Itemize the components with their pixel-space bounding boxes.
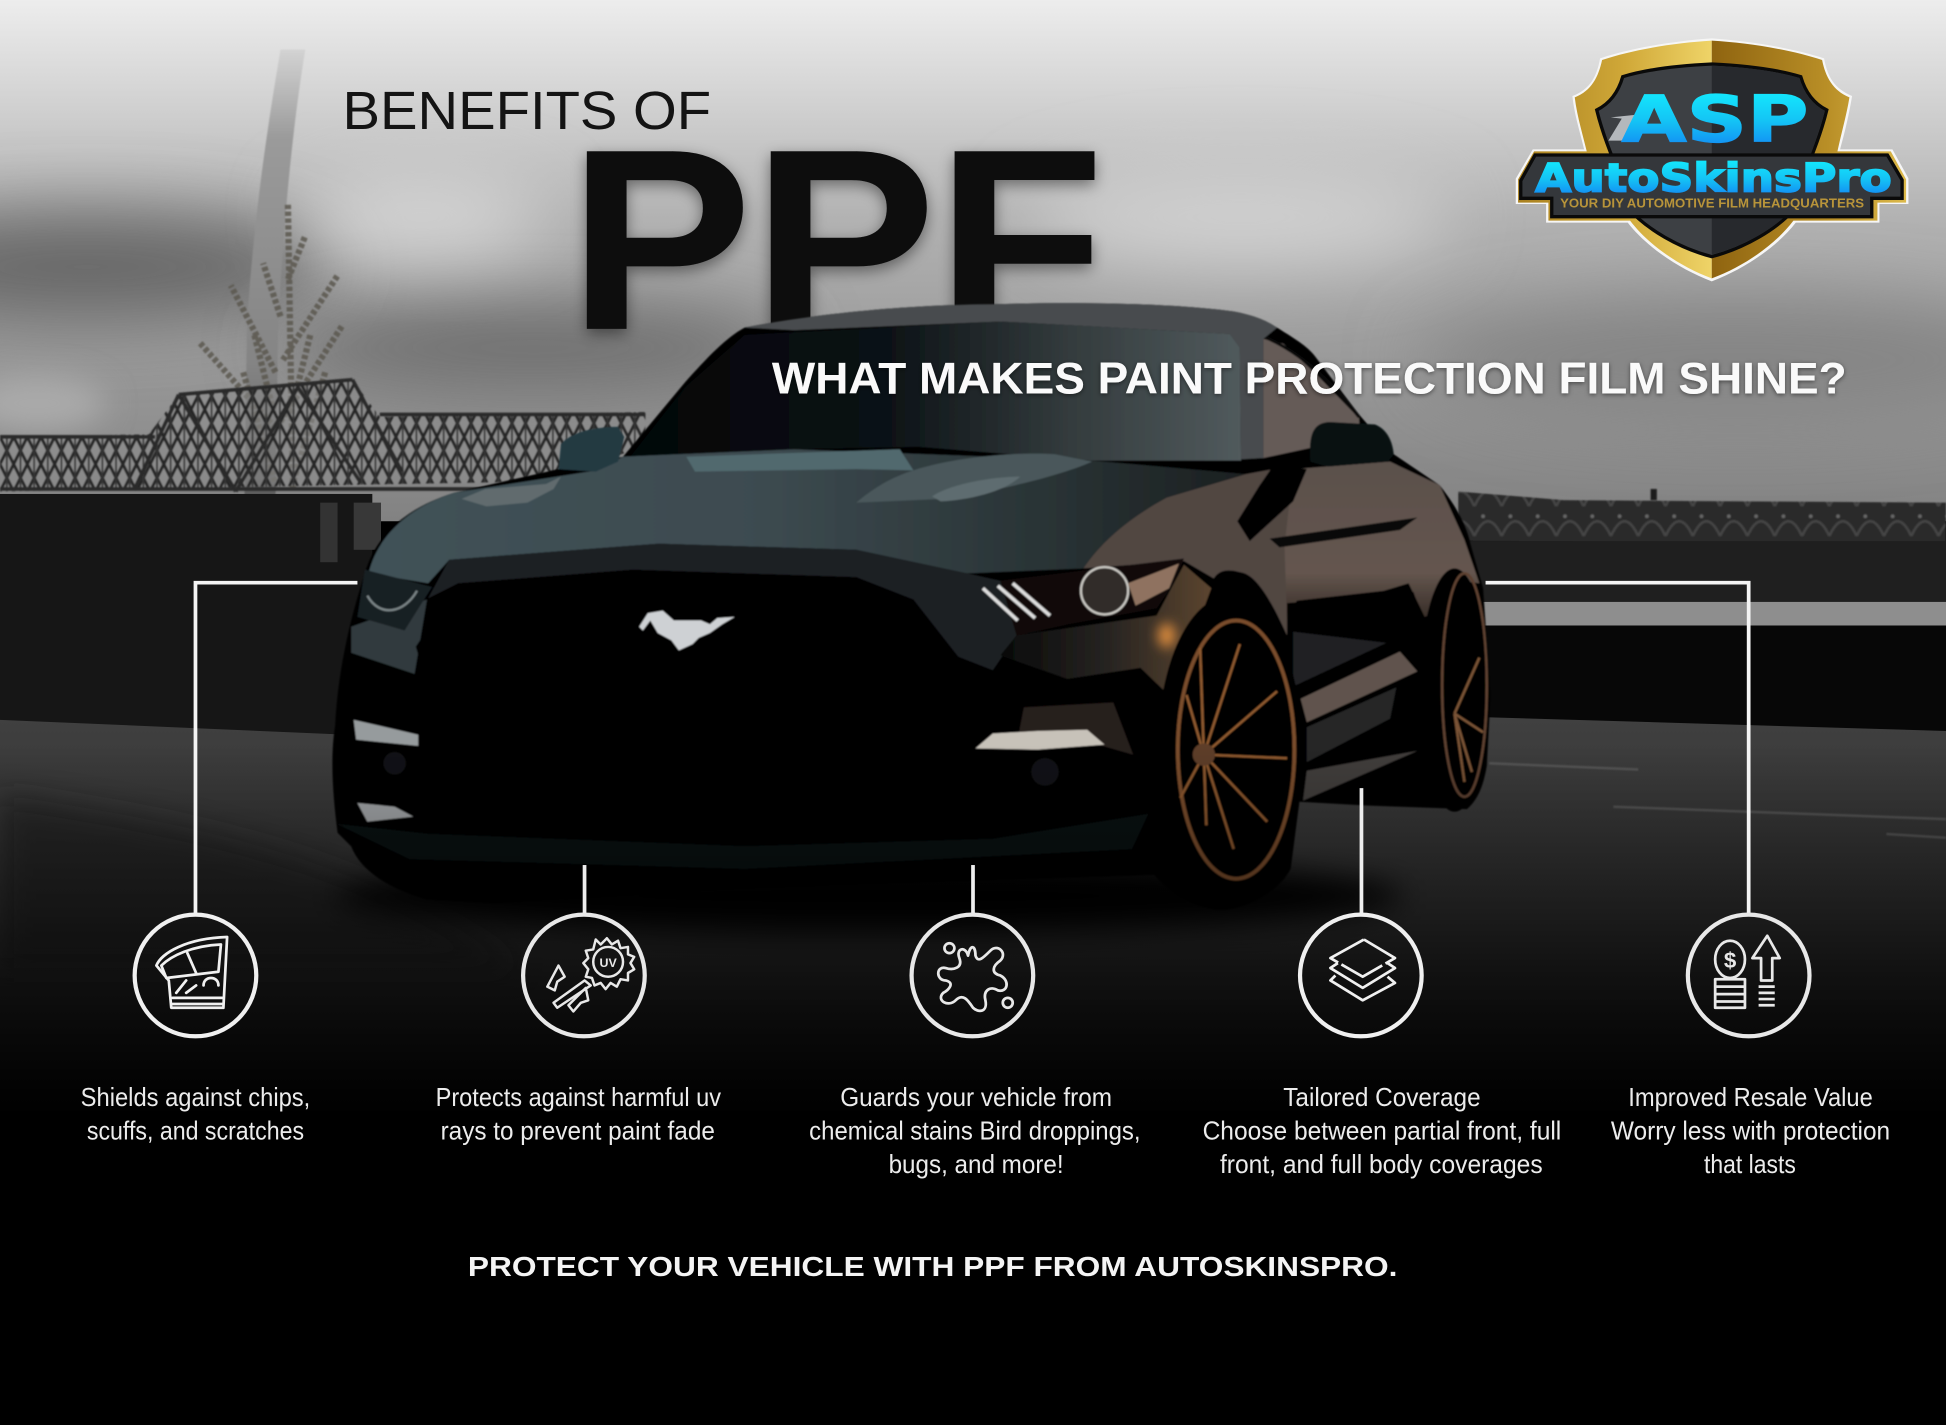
hood [369,449,1246,583]
heading: benefits of: BENEFITS OF [343,82,711,141]
bridge: right [1458,489,1946,546]
text: chips and scratches: scuffs, and scratches [87,1115,304,1145]
icon: coins and arrow [1688,915,1809,1036]
brow strip [428,544,967,599]
right headlight [1000,558,1184,635]
hood vent: right [856,454,1092,503]
tree [199,205,343,490]
heading: PPF: PPF [568,95,1105,384]
text: uv rays [436,1082,721,1145]
icon: uv sun and arrows [523,915,645,1036]
car shadow [335,859,1402,933]
text: uv rays: Protects against harmful uv [436,1082,721,1112]
mustang emblem [639,611,735,650]
front fender [1083,469,1291,635]
shield gold right [1712,41,1906,278]
bottom fade to black [0,745,1946,1117]
text: tailored coverage: front, and full body coverages [1220,1149,1543,1179]
left fog light [354,720,418,746]
background: cloudy sky [0,0,1946,521]
hood vent: left [462,477,561,506]
text: chips and scratches: Shields against chips, [81,1082,310,1112]
logo: AutoSkinsPro shield [1516,38,1908,281]
left headlight [357,570,432,630]
connector: stains [972,865,974,915]
text: chips and scratches [81,1082,310,1145]
subheading: WHAT MAKES PAINT PROTECTION FILM SHINE? [772,354,1847,403]
text: tailored coverage: Tailored Coverage [1283,1082,1481,1112]
embankment and water [0,494,1946,742]
lower bumper panel [1018,702,1133,755]
front wheel [1158,596,1302,899]
left mirror [558,427,624,472]
icon: uv sun and arrows: UV [600,956,617,970]
mirror arm shadow [1237,465,1307,541]
text: resale value: Improved Resale Value [1628,1082,1873,1112]
text: resale value [1611,1082,1890,1179]
logo wordmark: AutoSkinsPro [1535,156,1892,202]
car photo [332,303,1491,910]
call to action: PROTECT YOUR VEHICLE WITH PPF FROM AUTOSKINSPRO. [468,1251,1397,1282]
left corner panel [351,599,427,674]
text: resale value: that lasts [1704,1149,1796,1179]
text: chemical stains: Guards your vehicle from [840,1082,1112,1112]
text: uv rays: rays to prevent paint fade [441,1115,715,1145]
side window [1263,339,1360,458]
amber reflection [1158,623,1175,648]
windshield [630,321,1241,460]
door handle [1270,518,1417,547]
connector: right bracket [1486,583,1749,915]
banner [1521,155,1902,217]
side of grille [913,573,1067,670]
icon: car door [135,915,256,1036]
text: resale value: Worry less with protection [1611,1115,1890,1145]
text: tailored coverage: Choose between partial front, full [1203,1115,1561,1145]
side sill [1301,652,1417,800]
shield gold left [1518,41,1712,278]
icon: stacked layers [1300,915,1422,1036]
hood centre strip [686,449,913,472]
door panel [1285,462,1479,621]
logo tagline: YOUR DIY AUTOMOTIVE FILM HEADQUARTERS [1560,197,1864,211]
text: chemical stains: chemical stains Bird droppings, [809,1115,1141,1145]
right fog light [975,730,1105,750]
bumper lip [338,814,1148,869]
icon: splat [912,915,1033,1036]
icon: coins and arrow: $ [1724,948,1737,973]
connector: uv [583,865,586,915]
text: chemical stains [809,1082,1141,1179]
lamp post [244,50,305,496]
black footer area [0,1114,1946,1425]
door reflection [1287,592,1422,697]
shield dark inner [1597,64,1827,257]
bridge: left [0,380,645,491]
car body [332,303,1491,910]
logo monogram: ASP [1622,84,1808,158]
right mirror [1310,422,1394,467]
road [0,717,1946,1117]
grille [416,570,958,694]
roof [745,303,1277,459]
text: chemical stains: bugs, and more! [889,1149,1064,1179]
text: tailored coverage [1203,1082,1561,1179]
rear wheel [1420,568,1489,812]
right bumper corner [1000,565,1211,702]
connector: coverage [1360,788,1363,915]
connector: left bracket [195,583,357,915]
